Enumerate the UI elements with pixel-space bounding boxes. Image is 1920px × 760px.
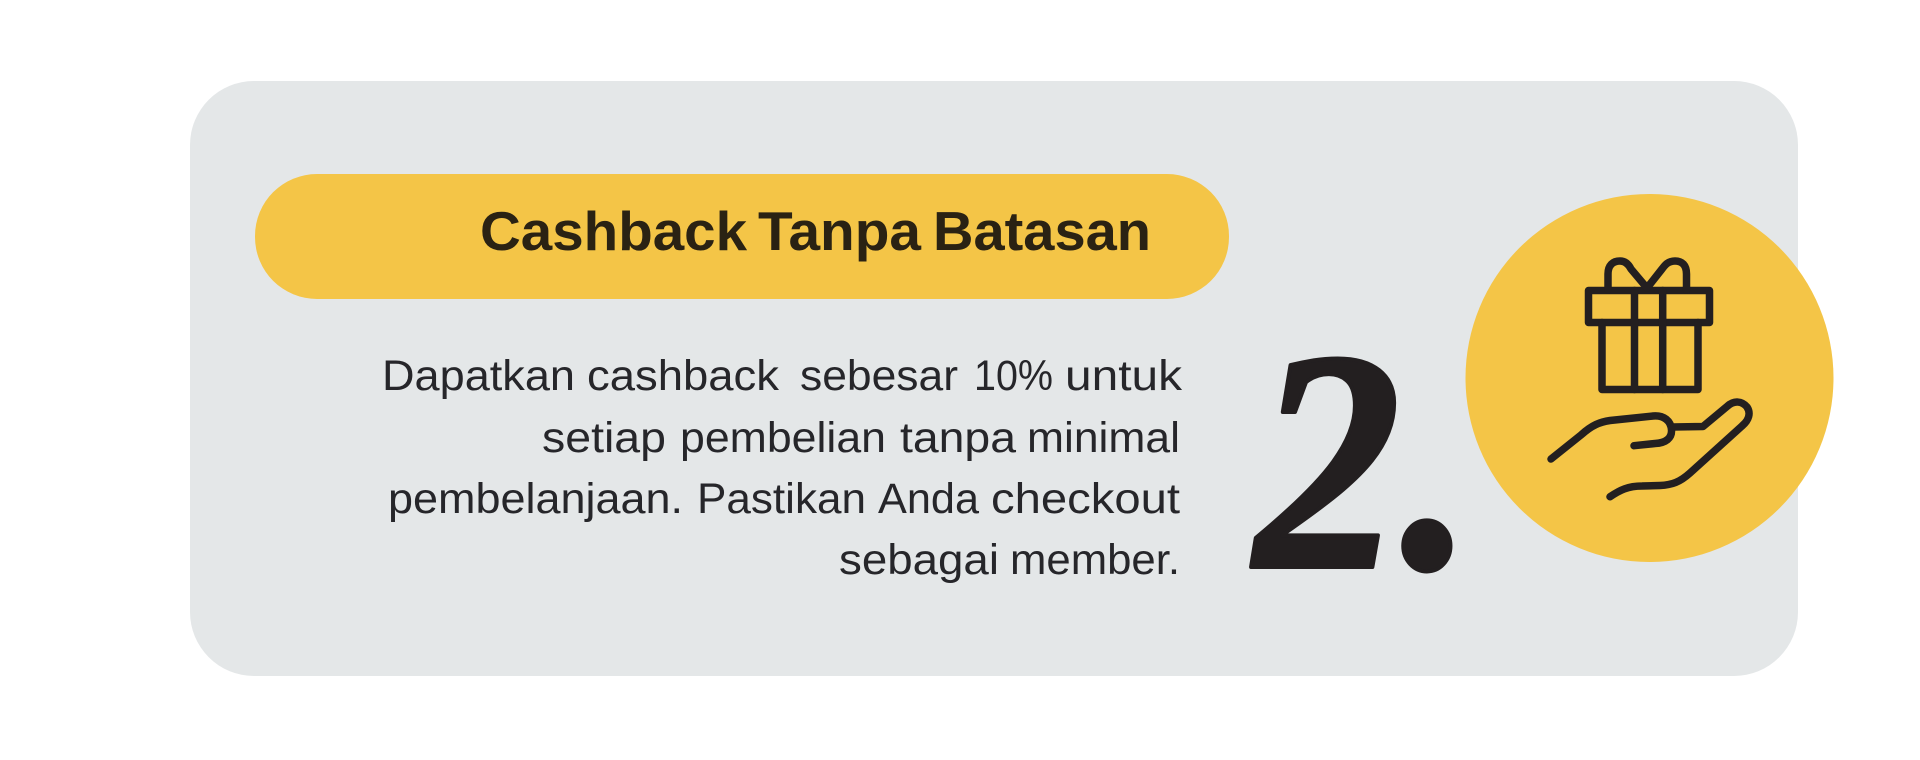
body text block: minimal bbox=[1027, 414, 1180, 462]
panel: grey background bbox=[190, 81, 1798, 676]
body text block: pembelian bbox=[680, 414, 886, 462]
heading text: Batasan bbox=[933, 200, 1151, 262]
icon: gift bbox=[1588, 261, 1710, 390]
heading text: Cashback bbox=[480, 200, 747, 262]
body text block: Dapatkan bbox=[382, 352, 575, 400]
heading text bbox=[480, 200, 1151, 262]
step number: 2. bbox=[1250, 286, 1474, 635]
body text block: 10% bbox=[974, 352, 1053, 400]
body text block: setiap bbox=[542, 414, 666, 462]
icon: hand bbox=[1551, 402, 1749, 497]
icon circle bbox=[1466, 194, 1834, 562]
heading pill bbox=[255, 174, 1229, 299]
body text block: checkout bbox=[991, 475, 1180, 523]
body text block: Pastikan bbox=[697, 475, 866, 523]
body text block: untuk bbox=[1065, 352, 1183, 400]
body text block: pembelanjaan. bbox=[388, 475, 683, 523]
heading text: Tanpa bbox=[758, 200, 921, 262]
body text block: tanpa bbox=[900, 414, 1016, 462]
body text block: member. bbox=[1010, 536, 1180, 584]
body text block bbox=[382, 352, 1183, 584]
body text block: cashback bbox=[587, 352, 780, 400]
body text block: Anda bbox=[878, 475, 979, 523]
body text block: sebagai bbox=[839, 536, 999, 584]
body text block: sebesar bbox=[800, 352, 958, 400]
